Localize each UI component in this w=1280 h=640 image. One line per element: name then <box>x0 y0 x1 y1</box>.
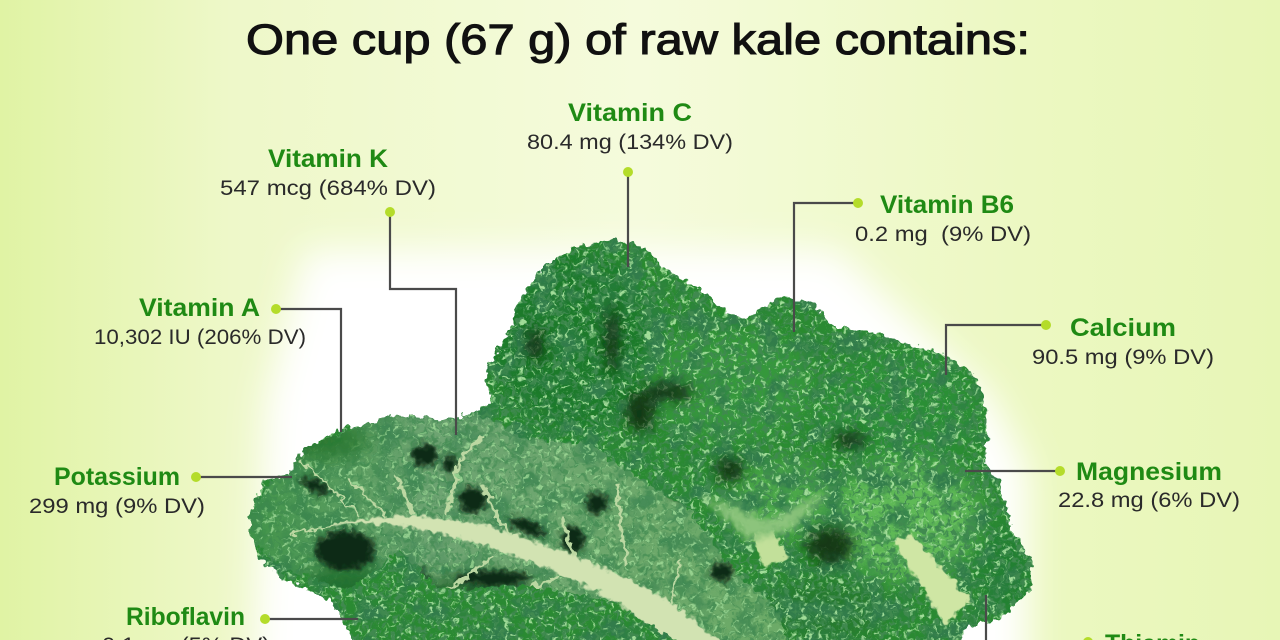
white halo behind kale <box>252 250 1028 640</box>
callout: Potassium: Potassium <box>54 463 180 491</box>
callout: Vitamin A <box>94 294 341 432</box>
callout: Riboflavin: Riboflavin <box>126 603 245 631</box>
callout: Vitamin C: Vitamin C <box>568 99 692 127</box>
title: One cup (67 g) of raw kale contains: <box>246 16 1030 64</box>
leaf holes <box>298 444 734 592</box>
right pale stalks <box>700 490 970 625</box>
callout: Magnesium <box>965 458 1240 512</box>
callout: Riboflavin <box>102 603 358 640</box>
callout: Calcium <box>946 314 1214 375</box>
callout: Vitamin B6: 0.2 mg (9% DV) <box>855 223 1031 246</box>
callout: Vitamin K: Vitamin K <box>268 145 388 173</box>
callout: Vitamin C <box>527 99 733 267</box>
leaf midrib <box>330 516 725 640</box>
callout: Vitamin K: 547 mcg (684% DV) <box>220 177 436 200</box>
callout: Magnesium: 22.8 mg (6% DV) <box>1058 489 1240 512</box>
callout: Magnesium: Magnesium <box>1076 458 1222 486</box>
callout: Vitamin C: 80.4 mg (134% DV) <box>527 131 733 154</box>
kale tonal masses <box>485 250 1030 640</box>
kale crevices <box>526 306 868 563</box>
callout: Vitamin K <box>220 145 456 435</box>
callout: Calcium: 90.5 mg (9% DV) <box>1032 346 1214 369</box>
callout: Potassium <box>29 463 292 518</box>
leaf shadowed lower frill <box>270 422 560 640</box>
callout: Vitamin B6 <box>794 191 1031 332</box>
kale illustration <box>230 220 1050 640</box>
callout: Potassium: 299 mg (9% DV) <box>29 495 205 518</box>
main leaf <box>240 405 800 640</box>
callout: Thiamin <box>986 595 1200 640</box>
leaf veins <box>290 435 682 605</box>
callout: Vitamin A: Vitamin A <box>139 294 260 322</box>
callout: Vitamin B6: Vitamin B6 <box>880 191 1014 219</box>
callout: Vitamin A: 10,302 IU (206% DV) <box>94 326 306 349</box>
callout: Calcium: Calcium <box>1070 314 1176 342</box>
